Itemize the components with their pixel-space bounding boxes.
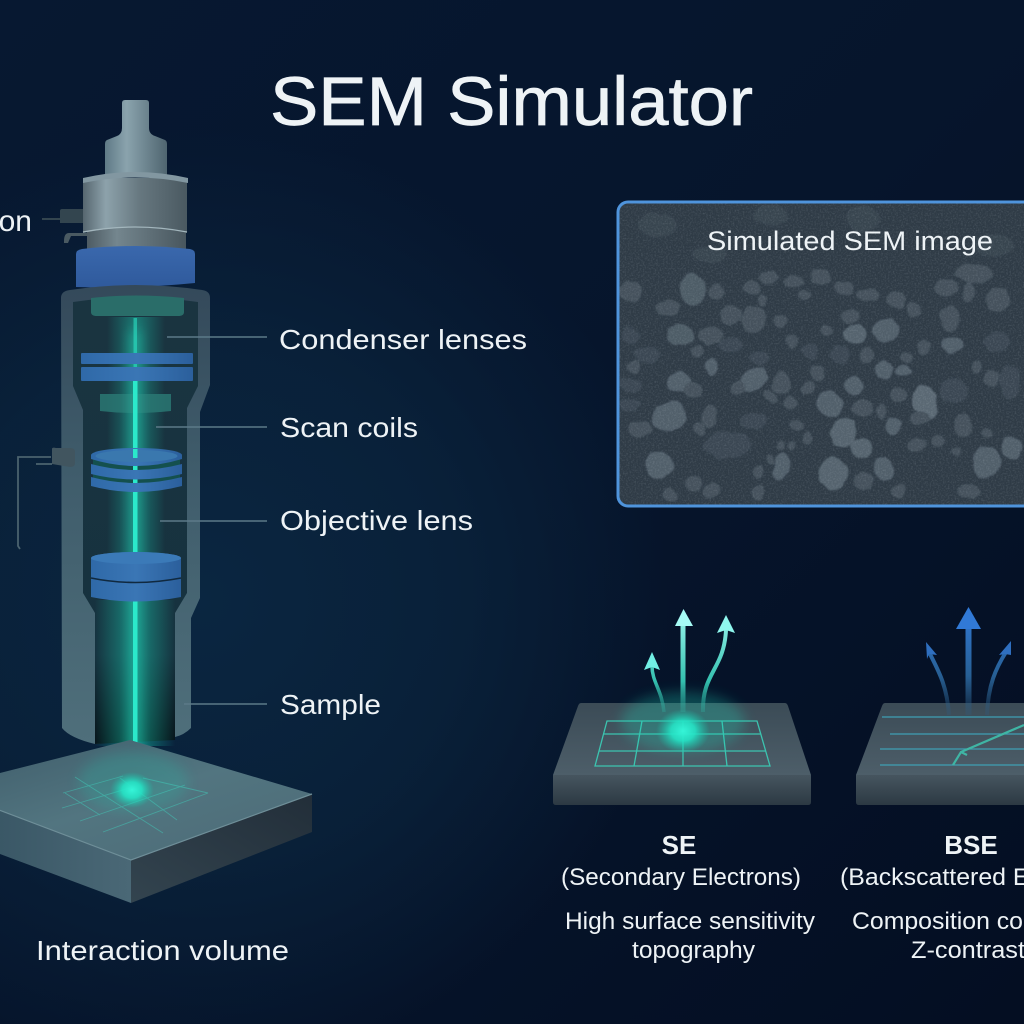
- label: condenser lenses: Condenser lenses: [279, 324, 527, 355]
- isometric grid: [62, 776, 208, 833]
- beam glow: [95, 317, 175, 746]
- SE glow spot: [621, 692, 745, 753]
- stage left face: [0, 788, 131, 903]
- label: sample: Sample: [280, 689, 381, 720]
- leader lines: [156, 337, 267, 704]
- electron gun housing: [42, 100, 188, 252]
- SE description: High surface sensitivity: [565, 908, 815, 935]
- stage top: [0, 740, 312, 860]
- speckle noise: [618, 202, 1024, 506]
- SE description: [565, 908, 815, 964]
- condenser discs: [81, 353, 193, 381]
- objective lens discs: [91, 552, 181, 602]
- BSE scan lines: [880, 717, 1024, 765]
- panel: SE signal: [553, 609, 815, 964]
- beam halo: [130, 330, 140, 798]
- SE grid: [595, 721, 770, 766]
- electron beam: [133, 318, 138, 790]
- SE description: topography: [632, 937, 755, 964]
- sample stage: [0, 740, 312, 903]
- blue collar ring: [76, 246, 195, 288]
- label: scan coils: Scan coils: [280, 412, 418, 443]
- SE plate: [553, 703, 811, 805]
- label: objective lens: Objective lens: [280, 505, 473, 536]
- condenser block top: [91, 296, 184, 316]
- stage glow: [78, 752, 188, 812]
- second condenser block: [100, 394, 171, 413]
- SE heading: SE: [662, 830, 696, 860]
- SE arrows: [644, 609, 735, 712]
- SE full name: (Secondary Electrons): [561, 864, 801, 891]
- SEM grain texture: [618, 202, 1024, 506]
- column labels: [0, 205, 527, 966]
- panel border: [618, 202, 1024, 506]
- BSE description: [852, 908, 1024, 964]
- BSE heading: BSE: [944, 830, 998, 860]
- BSE description: Z-contrast: [911, 937, 1024, 964]
- side connector and wire: [18, 448, 75, 549]
- electron column: [18, 100, 210, 798]
- column interior: [73, 298, 198, 744]
- panel: simulated SEM image: [618, 202, 1024, 506]
- stage right face: [131, 794, 312, 903]
- label: interaction volume: Interaction volume: [36, 935, 289, 966]
- beam landing spot: [110, 772, 154, 808]
- title: SEM Simulator: [270, 63, 753, 140]
- BSE arrows: [926, 607, 1011, 715]
- scan coils rings: [91, 448, 182, 492]
- panel: BSE signal: [840, 607, 1024, 964]
- column housing walls: [61, 285, 210, 744]
- panel caption: Simulated SEM image: [707, 226, 993, 256]
- BSE plate: [856, 703, 1024, 805]
